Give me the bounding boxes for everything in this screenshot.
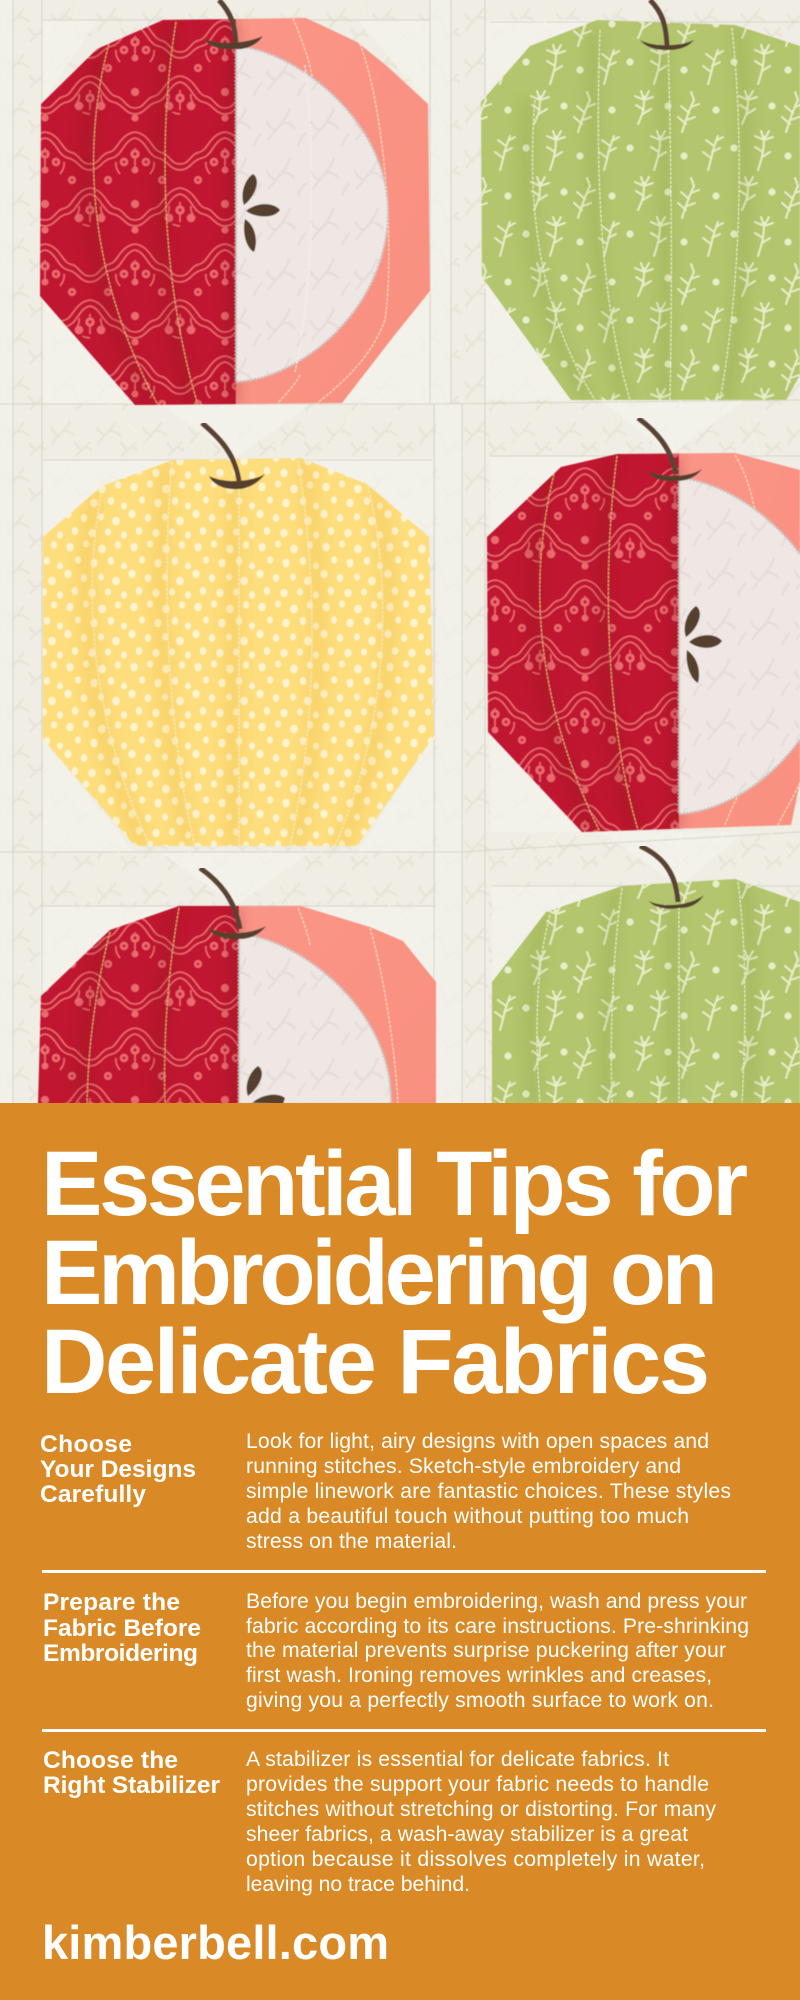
heading: tip 2 (43, 1589, 201, 1667)
text: tip 2: the material prevents surprise puckering after your (246, 1639, 726, 1662)
heading: tip 3: Right Stabilizer (43, 1772, 220, 1799)
text: tip 2 (246, 1590, 749, 1712)
panel: tip 2 (43, 1589, 749, 1712)
text: tip 3: leaving no trace behind. (246, 1873, 470, 1896)
heading: tip 1: Choose (40, 1431, 132, 1458)
panel: tip 3 (43, 1747, 716, 1896)
title: Essential Tips for (41, 1133, 748, 1235)
text: tip 1: add a beautiful touch without putting too much (246, 1505, 689, 1528)
apple stem (640, 846, 704, 909)
heading: tip 2: Prepare the (43, 1589, 180, 1616)
text: tip 1: Look for light, airy designs with open spaces and (246, 1430, 709, 1453)
text: tip 3: option because it dissolves completely in water, (246, 1848, 705, 1871)
text: tip 1: simple linework are fantastic choices. These styles (246, 1480, 731, 1503)
panel: tip 1 (40, 1430, 731, 1553)
seams (0, 0, 800, 1104)
apple: red and coral half, centre right (480, 418, 800, 840)
apple flesh (236, 46, 388, 382)
heading: tip 1 (40, 1431, 196, 1508)
title: Delicate Fabrics (41, 1311, 710, 1413)
apple: red and coral half, bottom left (30, 868, 444, 1110)
apple: green, bottom right (485, 846, 800, 1107)
quilting lines (40, 0, 800, 990)
photo: quilted apple blocks (0, 0, 800, 1110)
text: tip 1: running stitches. Sketch-style embroidery and (246, 1455, 681, 1478)
apple seeds (685, 606, 722, 683)
text: tip 1: stress on the material. (246, 1530, 457, 1553)
text: tip 2: first wash. Ironing removes wrinkles and creases, (246, 1664, 712, 1687)
panel: orange text area (0, 1103, 800, 2000)
apple stem (638, 418, 702, 481)
text: tip 3: provides the support your fabric needs to handle (246, 1773, 709, 1796)
apple: green, top right (470, 0, 800, 410)
apple seeds (247, 1066, 285, 1104)
text: tip 1 (246, 1430, 731, 1553)
heading: tip 2: Fabric Before (43, 1615, 201, 1642)
heading: tip 1: Carefully (40, 1481, 146, 1508)
apple flesh (239, 934, 391, 1104)
pale sashing strips (0, 0, 462, 1104)
heading: tip 3: Choose the (43, 1747, 178, 1774)
apple stem (202, 423, 265, 489)
text: tip 3: sheer fabrics, a wash-away stabilizer is a great (246, 1823, 688, 1846)
heading: tip 1: Your Designs (40, 1456, 196, 1483)
stitching (94, 22, 198, 405)
text: tip 3: A stabilizer is essential for delicate fabrics. It (246, 1748, 669, 1771)
apple flesh (679, 478, 800, 814)
text: tip 2: Before you begin embroidering, wash and press your (246, 1590, 747, 1613)
title: Embroidering on (41, 1222, 718, 1324)
text: tip 2: giving you a perfectly smooth surface to work on. (246, 1689, 714, 1712)
quilt background fabric (0, 0, 800, 1104)
text: tip 3: stitches without stretching or distorting. For many (246, 1798, 716, 1821)
apple stem (204, 0, 263, 49)
title (41, 1133, 748, 1413)
apple seeds (242, 174, 280, 252)
apple stem (200, 868, 266, 939)
apple: red and coral half, top left (30, 0, 436, 410)
text: tip 2: fabric according to its care instructions. Pre-shrinking (246, 1615, 749, 1638)
apple: yellow, centre left (35, 423, 440, 850)
footer: website: kimberbell.com (42, 1916, 389, 1969)
apple stem (640, 0, 694, 50)
heading: tip 2: Embroidering (43, 1640, 198, 1667)
text: tip 3 (246, 1748, 716, 1896)
heading: tip 3 (43, 1747, 220, 1799)
lighter wedge pieces (40, 20, 745, 996)
